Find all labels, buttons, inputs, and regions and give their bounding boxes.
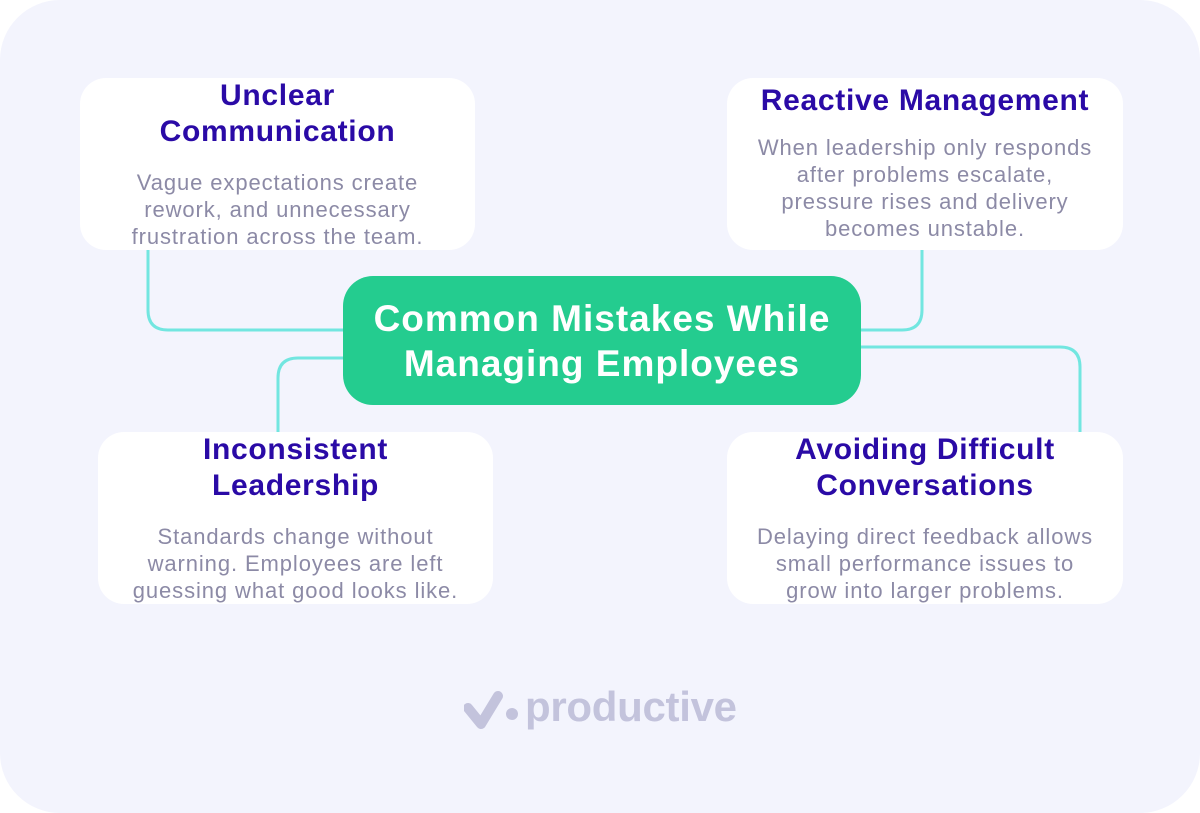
card: Unclear Communication: Unclear (220, 79, 335, 112)
card: Avoiding Difficult Conversations: Conversations (816, 469, 1034, 502)
card: Unclear Communication: rework, and unnecessary (144, 197, 411, 222)
card: Unclear Communication (80, 78, 475, 250)
title: Managing Employees (404, 342, 800, 384)
card: Avoiding Difficult Conversations: Avoiding Difficult (795, 433, 1055, 466)
card: Inconsistent Leadership: Inconsistent (203, 433, 388, 466)
card: Reactive Management: When leadership only responds (758, 135, 1092, 160)
card: Unclear Communication: frustration across the team. (132, 224, 423, 249)
card: Avoiding Difficult Conversations: Delaying direct feedback allows (757, 524, 1093, 549)
card: Reactive Management (727, 78, 1123, 250)
card: Reactive Management: pressure rises and delivery (781, 189, 1069, 214)
card: Inconsistent Leadership (98, 432, 493, 604)
card: Reactive Management: after problems escalate, (797, 162, 1053, 187)
card: Avoiding Difficult Conversations: small performance issues to (776, 551, 1074, 576)
card: Inconsistent Leadership: warning. Employees are left (148, 551, 443, 576)
card: Unclear Communication: Communication (160, 115, 395, 148)
card: Inconsistent Leadership: Standards change without (158, 524, 434, 549)
title (343, 276, 861, 405)
logo: productive: productive (525, 683, 737, 730)
card: Unclear Communication: Vague expectations create (137, 170, 418, 195)
card: Avoiding Difficult Conversations (727, 432, 1123, 604)
card: Inconsistent Leadership: Leadership (212, 469, 379, 502)
card: Reactive Management: becomes unstable. (825, 216, 1025, 241)
card: Avoiding Difficult Conversations: grow into larger problems. (786, 578, 1064, 603)
card: Inconsistent Leadership: guessing what good looks like. (133, 578, 458, 603)
card: Reactive Management: Reactive Management (761, 84, 1089, 117)
title: Common Mistakes While (374, 298, 830, 338)
